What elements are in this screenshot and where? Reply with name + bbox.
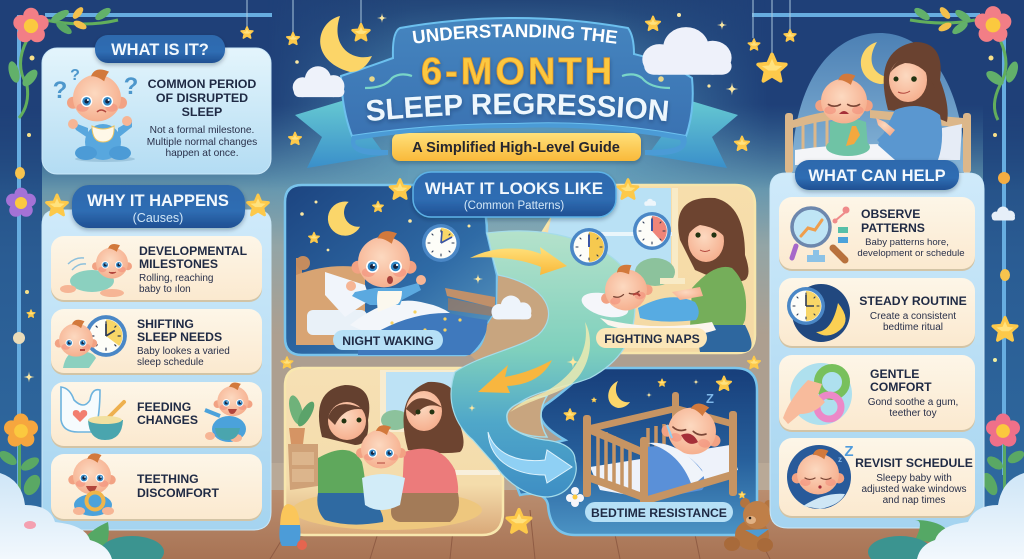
mattress	[590, 445, 738, 497]
right wall strip	[983, 0, 1024, 515]
panel: why it happens	[42, 185, 271, 530]
swirl left	[365, 74, 412, 88]
mother in pink	[391, 382, 464, 522]
subtitle pill: A Simplified High-Level Guide	[412, 140, 620, 156]
card text: TEETHING	[137, 472, 199, 486]
card text	[857, 207, 965, 259]
heading pill: WHY IT HAPPENS	[87, 192, 229, 210]
second wall gap inside ribbon bend	[507, 396, 547, 437]
heading pill: WHAT IS IT?	[111, 41, 209, 59]
baby	[55, 320, 97, 368]
arrow: blue right	[488, 432, 572, 483]
plant and nightstand	[286, 394, 318, 490]
heading: common period	[148, 77, 256, 119]
feeding baby	[205, 382, 252, 442]
description	[147, 125, 257, 159]
blanket	[644, 443, 705, 500]
bedtime scene foreground	[564, 376, 745, 522]
window	[380, 370, 500, 475]
clouds and leaves bottom left	[0, 473, 164, 559]
card text: DEVELOPMENTAL	[139, 244, 248, 258]
stars by heading	[281, 180, 760, 532]
banner main shape	[341, 18, 693, 136]
panel: what can help	[770, 160, 984, 528]
crib front	[583, 411, 737, 522]
card: revisit schedule	[779, 438, 975, 518]
scene panel: parents comforting	[285, 368, 503, 535]
card text	[137, 472, 219, 500]
wall baseboard	[0, 463, 1024, 490]
card text: Rolling, reaching	[139, 273, 214, 284]
mother	[678, 198, 752, 352]
heading pill: WHAT CAN HELP	[808, 167, 946, 185]
clock and moon icon	[787, 284, 850, 342]
card text: SLEEP NEEDS	[137, 330, 222, 344]
label: fighting naps	[596, 328, 707, 348]
card text: bedtime ritual	[883, 322, 943, 333]
banner curl left	[351, 124, 514, 155]
description: happen at once.	[165, 148, 239, 159]
label: bedtime resistance: BEDTIME RESISTANCE	[591, 506, 727, 520]
clouds and leaves bottom right	[868, 473, 1024, 559]
baby awake	[346, 231, 426, 312]
swirl right	[622, 74, 670, 88]
card text	[868, 367, 958, 419]
heading pill	[95, 35, 225, 63]
heading pill	[72, 185, 245, 228]
sleepy baby on bed	[579, 260, 716, 336]
heading: common period: COMMON PERIOD	[148, 77, 256, 91]
sad baby	[815, 74, 873, 156]
teether and hand icon	[783, 363, 852, 425]
description: Multiple normal changes	[147, 137, 257, 148]
small cloud over ribbon	[491, 296, 531, 319]
mattress and pillow	[795, 124, 962, 165]
sleeping baby icon	[787, 443, 854, 509]
crying baby	[658, 397, 727, 460]
card: steady routine	[779, 278, 975, 348]
heading pill: (Causes)	[133, 211, 183, 225]
wall gap inside ribbon bend	[470, 275, 549, 364]
card text: and nap times	[883, 495, 945, 506]
card: shifting sleep needs	[51, 309, 262, 375]
toy: egg rattle	[279, 504, 307, 550]
dark upper corners	[0, 0, 1024, 190]
clock with red wedge	[633, 212, 671, 250]
card text: OBSERVE	[861, 207, 920, 221]
baby with teether	[68, 453, 116, 516]
bed and crib rail	[296, 256, 495, 345]
crawling baby	[60, 244, 132, 297]
card text: COMFORT	[870, 380, 932, 394]
wooden floor	[0, 490, 1024, 559]
moon and stars	[564, 376, 745, 498]
card: teething discomfort	[51, 453, 262, 521]
icon: moon and clouds	[293, 16, 732, 97]
flowing ribbon path	[451, 231, 635, 497]
heading pill: what it looks like: WHAT IT LOOKS LIKE	[425, 179, 603, 198]
text z: Z	[706, 391, 714, 406]
title line 2: 6-MONTH	[421, 51, 615, 93]
heading: common period: OF DISRUPTED	[156, 91, 248, 105]
card text	[859, 294, 967, 333]
label: night waking	[333, 330, 443, 350]
baby confused illustration: ?	[124, 73, 138, 100]
banner left tail	[295, 100, 385, 168]
toy: teddy bear	[724, 498, 774, 552]
card text	[855, 456, 973, 506]
card text: Gond soothe a gum,	[868, 397, 958, 408]
moon	[328, 201, 360, 236]
card: developmental milestones	[51, 236, 262, 302]
decoration: corner vine top right	[910, 5, 1020, 120]
card text	[137, 400, 198, 427]
card text: CHANGES	[137, 413, 198, 427]
stars	[300, 200, 483, 284]
star left of heading	[47, 195, 67, 215]
card text	[137, 317, 230, 368]
card text: sleep schedule	[137, 357, 204, 368]
star right of heading	[248, 195, 268, 215]
description: Not a formal milestone.	[150, 125, 254, 136]
card text: GENTLE	[870, 367, 919, 381]
label: bedtime resistance	[585, 502, 733, 522]
panel: what is it	[42, 35, 271, 174]
hanging stars and moon above title	[241, 0, 796, 150]
sleeping baby icon: z	[838, 455, 842, 464]
title line 3: SLEEP REGRESSION	[365, 93, 670, 124]
clock	[422, 224, 460, 262]
baby confused illustration	[53, 67, 138, 162]
card text: Baby lookes a varied	[137, 346, 230, 357]
left wall strip	[0, 0, 42, 515]
baby between parents	[356, 425, 406, 510]
sleeping baby icon: Z	[844, 443, 854, 460]
card text: development or schedule	[857, 248, 965, 259]
subtitle pill	[392, 133, 641, 161]
banner right tail	[648, 100, 738, 168]
card text	[139, 244, 248, 295]
card text: STEADY ROUTINE	[859, 294, 967, 308]
crib	[785, 110, 971, 173]
mother	[876, 42, 948, 160]
naps scene foreground	[570, 198, 752, 352]
window and sky	[548, 188, 685, 286]
crib back rail	[590, 392, 735, 470]
heading pill	[795, 160, 959, 190]
arrow: gold right	[470, 247, 567, 275]
scene panel: bedtime resistance	[505, 368, 757, 535]
card: observe patterns	[779, 197, 975, 271]
card text: teether toy	[889, 408, 937, 419]
decoration: corner vine top left	[6, 5, 118, 118]
bib, bowl and spoon	[61, 387, 124, 440]
dome window	[792, 33, 965, 172]
magnifier icon	[792, 206, 850, 262]
rug	[292, 490, 482, 530]
title line 1: UNDERSTANDING THE	[412, 24, 618, 44]
card text: SHIFTING	[137, 317, 194, 331]
baby confused illustration: ?	[53, 77, 67, 104]
center glow	[215, 0, 815, 300]
arrow: gold left	[478, 360, 552, 393]
side decorations	[13, 56, 1017, 382]
blanket	[350, 301, 487, 355]
scene panel: fighting naps	[542, 185, 755, 353]
card text: REVISIT SCHEDULE	[855, 456, 973, 470]
mother in green	[317, 385, 383, 525]
card text: baby to ılon	[139, 284, 191, 295]
decoration: orange flower	[0, 414, 44, 500]
heading pill: what it looks like: (Common Patterns)	[464, 200, 564, 212]
card text: MILESTONES	[139, 257, 218, 271]
card: gentle comfort	[779, 355, 975, 432]
card text: Sleepy baby with	[876, 473, 952, 484]
inner light ribbon	[510, 322, 590, 412]
banner curl right	[514, 123, 687, 155]
label: night waking: NIGHT WAKING	[342, 334, 434, 348]
clock	[85, 315, 127, 357]
decoration: purple flower	[6, 188, 36, 217]
heading pill: what it looks like	[413, 172, 616, 217]
flower toy	[566, 487, 584, 507]
title banner	[295, 17, 738, 168]
sparkles on ribbon	[468, 356, 580, 412]
scene panel: night waking	[285, 185, 497, 355]
card text: DISCOMFORT	[137, 486, 219, 500]
card: feeding changes	[51, 382, 262, 448]
decoration: pink flower right	[979, 414, 1024, 500]
card text: FEEDING	[137, 400, 191, 414]
top right scene: mother and baby	[785, 33, 971, 173]
card text: PATTERNS	[861, 221, 925, 235]
heading: common period: SLEEP	[182, 105, 222, 119]
baby confused illustration: ?	[70, 67, 80, 84]
card text: Create a consistent	[870, 311, 956, 322]
card text: Baby patterns hore,	[865, 237, 949, 248]
moon	[861, 42, 892, 84]
card text: adjusted wake windows	[861, 484, 967, 495]
clock on ribbon	[570, 228, 608, 266]
label: fighting naps: FIGHTING NAPS	[604, 332, 700, 346]
